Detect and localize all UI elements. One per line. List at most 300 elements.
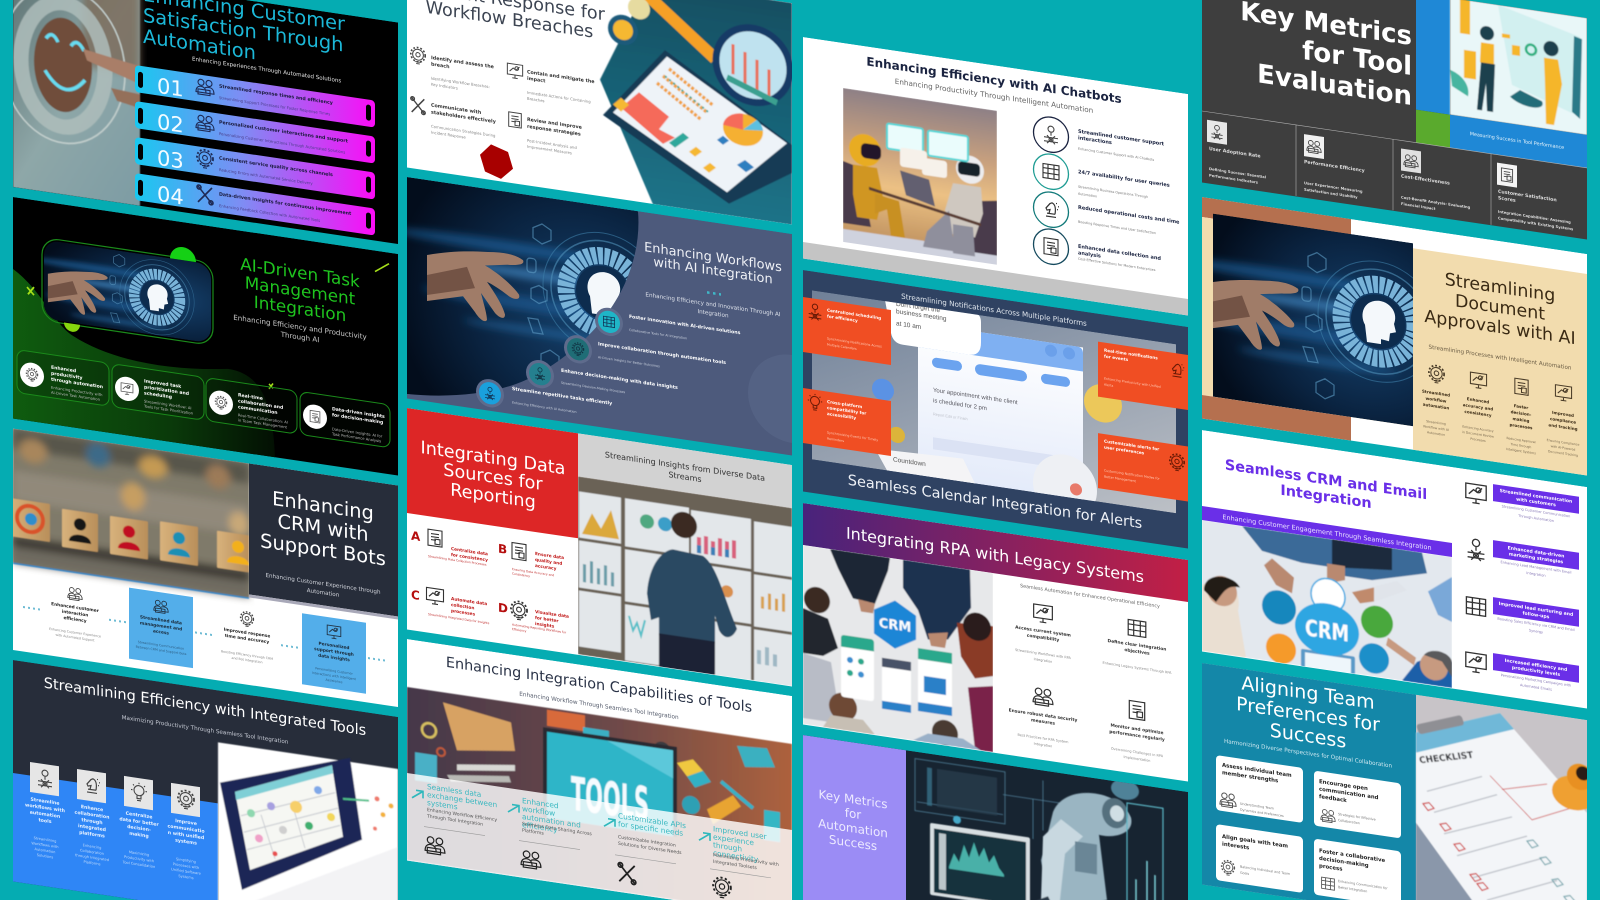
item D: Efficiency	[512, 627, 527, 633]
item: streamline workflows: Streamline	[31, 797, 59, 807]
feature: increased efficiency: Personalizing Marketing Campaigns with	[1501, 673, 1571, 688]
column 4: support through	[314, 646, 354, 658]
title block: Reporting	[450, 480, 536, 513]
column: improved user experience: Integrated Toolsets	[713, 859, 757, 871]
item: centralize data: making	[129, 831, 149, 840]
card 4: Task Performance Analysis	[331, 432, 381, 443]
subtitle: Enhancing Experiences Through Automated Solutions	[192, 57, 341, 85]
feature: data-driven marketing	[1468, 536, 1579, 583]
column: faster decisions: Faster	[1514, 403, 1529, 410]
subtitle: Enhancing Efficiency and Productivity	[233, 313, 367, 341]
item C: processes	[451, 608, 476, 618]
column 2	[129, 588, 193, 668]
item B: accuracy	[535, 563, 557, 572]
metric: user adoption: Defining Success: Essential	[1209, 167, 1266, 179]
cell: data security	[1009, 684, 1077, 752]
item: communicate	[411, 96, 497, 144]
metric: cost effectiveness: Financial Impact	[1401, 202, 1436, 211]
item: contain: Breaches	[527, 96, 545, 103]
item: centralize data: Centralize	[126, 811, 152, 821]
card 2: Improved task	[144, 378, 182, 390]
title block: Key Metrics	[818, 787, 888, 811]
panel: integrating RPA with legacy systems	[803, 503, 1188, 782]
item: communicate: stakeholders effectively	[431, 110, 497, 125]
item D	[498, 598, 569, 639]
panel: enhancing integration capabilities of tools	[407, 639, 792, 900]
illustration: calendar window: Countdown	[893, 456, 926, 468]
panel: enhancing workflows with AI integration	[393, 175, 836, 462]
item: centralize data: decision-	[127, 824, 151, 833]
metric: performance efficiency: User Experience: Measuring	[1304, 181, 1363, 194]
column 2: access	[153, 629, 169, 637]
card: open communication	[1314, 771, 1401, 838]
illustration: calendar window: Report Edit or Finish	[933, 412, 968, 421]
cell: monitor performance: performance regularly	[1109, 729, 1165, 743]
cell: assess compatibility: Access current system	[1015, 624, 1071, 639]
subtitle: Enhancing Workflow Through Seamless Tool Integration	[519, 692, 679, 721]
item: enhance collaboration: Collaboration	[80, 848, 104, 856]
illustration: robot and monitor	[915, 749, 1163, 900]
column: enhanced accuracy: accuracy and	[1463, 402, 1493, 412]
brown bottom band	[1202, 395, 1351, 441]
card 2: Streamlining Workflow: AI	[144, 399, 192, 410]
card 1: productivity	[51, 371, 82, 381]
panel: key metrics for tool evaluation	[1202, 0, 1587, 240]
blue panel background	[1202, 663, 1416, 900]
card: align goals: interests	[1222, 841, 1249, 851]
column: customizable APIs: Solutions for Diverse Needs	[618, 841, 682, 856]
title: Streamlining	[1445, 270, 1555, 306]
feature: streamlined communication: Through Automation	[1517, 514, 1554, 523]
metric: performance efficiency: Performance Efficiency	[1304, 159, 1365, 174]
item: improve collaboration	[564, 333, 726, 385]
card: collaborative decisions: Better Integration	[1338, 885, 1367, 893]
column: enhanced accuracy: in Document Review	[1462, 430, 1494, 439]
title block: CRM with	[277, 510, 369, 546]
card: align goals	[1216, 824, 1303, 893]
callout: real-time notifications	[1098, 342, 1188, 410]
item D: for better	[535, 615, 559, 625]
item: identify: breach	[431, 62, 450, 70]
illustration: analysts at dashboard	[1450, 0, 1587, 135]
cell: monitor performance: Monitor and optimize	[1111, 723, 1163, 736]
callout: real-time notifications: Alerts	[1104, 383, 1114, 388]
title: with AI Integration	[653, 255, 773, 288]
cell: define objectives	[1102, 616, 1172, 675]
column: improved compliance: Ensuring Compliance	[1547, 438, 1579, 447]
connector dots	[23, 607, 386, 661]
title block: Enhancing	[272, 487, 374, 525]
title: Evaluation	[1257, 59, 1412, 112]
title: Success	[1270, 719, 1346, 753]
item 03: 03	[157, 145, 184, 174]
cell: define objectives: Define clear integration	[1108, 638, 1166, 653]
item A: Streamlining Data Collection Processes	[428, 554, 487, 567]
column 4: Assistance	[326, 678, 343, 684]
column: improved user experience: Improved user	[713, 824, 768, 841]
title bar: Integrating RPA with Legacy Systems	[846, 523, 1144, 586]
callout: cross-platform: Cross-platform	[827, 399, 863, 409]
card 3: collaboration and	[238, 398, 283, 411]
item 02: Personalized customer interactions and support	[219, 120, 349, 145]
item: improve communication: Processes with	[173, 862, 199, 870]
item B: Ensuring Data Accuracy and	[512, 567, 554, 577]
table rules	[1202, 111, 1587, 239]
photo: desk with tools and laptop: TOOLS	[571, 767, 649, 832]
item 03: Consistent service quality across channels	[219, 156, 333, 178]
metric: customer satisfaction: Customer Satisfaction	[1498, 189, 1557, 203]
metric: user adoption: User Adoption Rate	[1209, 146, 1261, 160]
feature: lead nurturing	[1466, 593, 1579, 640]
callout: cross-platform: compatibility for	[827, 405, 867, 416]
title block	[249, 463, 398, 619]
panel: seamless CRM and email integration	[1202, 430, 1587, 711]
column: faster decisions	[1506, 377, 1536, 455]
item: improve communication: Simplifying	[176, 857, 196, 864]
photo: wooden blocks with person icons	[8, 428, 249, 599]
column: enhanced accuracy: Enhanced	[1467, 396, 1489, 405]
panel: customer satisfaction through automation	[1, 0, 398, 244]
item 03: Reducing Errors with Automated Service Delivery	[219, 167, 313, 186]
item: communicate: Incident Response	[431, 130, 466, 140]
cell: assess compatibility: Integration	[1034, 657, 1052, 664]
card 3: Real-time	[238, 392, 263, 402]
column: faster decisions: decision-	[1511, 409, 1532, 417]
callout: centralized scheduling: Multiple Calendars	[827, 343, 857, 351]
item: contain: Contain and mitigate the	[527, 69, 595, 85]
cell: assess compatibility: compatibility	[1027, 633, 1059, 643]
item D: Automating Reporting Workflows for	[512, 623, 567, 635]
callout: centralized scheduling: for efficiency	[827, 314, 858, 323]
column: streamlined workflow: automation	[1423, 402, 1449, 411]
column: enhanced accuracy: Processes	[1470, 437, 1486, 443]
column 4	[302, 613, 366, 694]
item: improve communication: Unified Software	[171, 867, 202, 876]
icon: red hexagon	[480, 143, 513, 181]
card: align goals: Goals	[1240, 871, 1249, 876]
title: Integration	[1280, 483, 1372, 512]
item: streamline workflows: tools	[38, 817, 52, 825]
title: Enhancing Workflows	[644, 240, 782, 275]
card: open communication: feedback	[1319, 794, 1347, 804]
photo: man viewing chart wall	[578, 476, 792, 687]
card: collaborative decisions	[1314, 839, 1401, 900]
title block: Success	[829, 832, 877, 853]
decorative circle	[748, 348, 836, 449]
title: Aligning Team	[1241, 671, 1375, 714]
card 1	[17, 350, 109, 406]
metric: customer satisfaction	[1497, 163, 1574, 232]
illustration: calendar window: Your appointment with the client	[933, 388, 1018, 406]
item 02	[135, 101, 375, 166]
column: improved compliance: and tracking	[1548, 422, 1578, 432]
item: streamline tasks: Enhancing Efficiency with AI Automation	[512, 401, 577, 414]
feature: data-driven marketing: Enhanced data-driven	[1508, 545, 1564, 560]
photo: CRM table meeting: CRM	[1305, 615, 1349, 648]
item 01: 01	[157, 73, 184, 102]
title block: for	[845, 806, 861, 822]
feature: data-driven marketing: Enhancing Lead Management with Email	[1500, 560, 1572, 575]
item A	[411, 527, 488, 567]
title: for Tool	[1302, 36, 1412, 82]
item D: D	[498, 601, 508, 616]
subtitle: Harmonizing Diverse Perspectives for Optimal Collaboration	[1224, 739, 1392, 770]
column: improved compliance: Document Tracking	[1548, 449, 1578, 458]
cell: data security: Ensure robust data security	[1009, 707, 1077, 724]
card: collaborative decisions: Foster a collaborative	[1319, 848, 1386, 864]
column: improved compliance	[1547, 383, 1579, 458]
item: foster innovation: Foster innovation with AI-driven solutions	[629, 314, 741, 336]
title block: Automation	[818, 816, 888, 841]
cell: monitor performance: Overcoming Challenges in RPA	[1111, 747, 1164, 758]
item: contain	[507, 63, 595, 111]
item: review: Post-Incident Analysis and	[527, 138, 577, 150]
item: communicate: Communication Strategies During	[431, 124, 496, 138]
column 4: Personalizing Customer	[315, 666, 353, 676]
column: enhanced accuracy: consistency	[1464, 409, 1492, 418]
green block	[1416, 110, 1450, 148]
item 04: Data-driven insights for continuous improvement	[219, 192, 352, 217]
item: enhanced data: Cost-Effective Solutions for Modern Enterprises	[1078, 257, 1156, 272]
card 2: Tools for Task Prioritization	[143, 404, 194, 416]
card 1: Enhancing Productivity with	[51, 386, 103, 397]
cell: monitor performance	[1109, 698, 1165, 765]
dots	[707, 292, 721, 294]
title: Streamlining Efficiency with Integrated Tools	[44, 675, 366, 739]
item: customer support: Enhancing Customer Support with AI Chatbots	[1078, 147, 1154, 162]
card 3	[206, 378, 297, 434]
feature: increased efficiency: productivity levels	[1512, 665, 1560, 678]
item: improve communication: n with unified	[168, 830, 204, 841]
card: collaborative decisions: decision-making	[1319, 856, 1369, 869]
photo: two robots chatting at table	[843, 88, 997, 266]
item: identify: Identifying Workflow Breaches:	[431, 76, 490, 89]
item: streamline workflows: automation	[30, 810, 60, 820]
card 4: for decision-making	[332, 412, 383, 426]
blue column	[1416, 0, 1450, 115]
feature: streamlined communication: Streamlining Customer Communication	[1502, 504, 1570, 519]
callout: centralized scheduling	[803, 297, 891, 365]
title: Enhancing Integration Capabilities of Tools	[446, 655, 752, 716]
card 1: AI-Driven Task Automation	[51, 391, 101, 402]
item: identify: Identify and assess the	[431, 55, 495, 70]
subtitle: Streamlining Notifications Across Multiple Platforms	[901, 292, 1087, 328]
item: improve communication: communicatio	[167, 823, 205, 835]
panel: seamless calendar integration for alerts	[803, 270, 1188, 549]
item: enhance collaboration: Platforms	[83, 860, 101, 866]
callout: cross-platform: accessibility	[827, 411, 856, 420]
metric: user adoption: Performance Indicators	[1209, 174, 1259, 185]
item C: C	[411, 588, 420, 603]
column 3: and Bot Integration	[232, 656, 262, 664]
item D: insights	[535, 621, 555, 630]
callout: real-time notifications: for events	[1104, 354, 1129, 362]
item: enhance decisions: Enhance decision-making with data insights	[561, 368, 678, 391]
item: streamline workflows: Workflows with	[31, 841, 59, 849]
photo: team around CRM table	[803, 545, 993, 753]
photo: team around CRM table: CRM	[879, 616, 911, 636]
card: open communication: Collaboration	[1338, 818, 1360, 825]
illustration: dashboard with magnifier	[600, 0, 792, 225]
item: reduced costs: Boosting Response Times and User Satisfaction	[1078, 220, 1156, 235]
column: faster decisions: Intelligent Systems	[1506, 447, 1536, 455]
card 1: Enhanced	[51, 365, 76, 374]
panel: enhancing CRM with support bots	[8, 428, 398, 707]
column 4: Personalized	[318, 641, 350, 651]
item: improve communication: systems	[175, 838, 197, 847]
item: foster innovation: Collaborative Tools for AI Integration	[629, 328, 687, 340]
column: enhanced workflow automation	[508, 794, 592, 877]
column: customizable APIs	[604, 809, 686, 892]
title block: Sources for	[443, 460, 543, 495]
column: customizable APIs: for specific needs	[618, 819, 683, 838]
item: enhance collaboration: Enhance	[81, 804, 103, 813]
column: improved user experience: through	[713, 840, 742, 854]
item: enhance collaboration: platforms	[79, 830, 105, 840]
illustration: calendar window: is cheduled for 2 pm	[933, 398, 987, 412]
metric: user adoption	[1207, 120, 1266, 186]
column 3: time and accuracy	[225, 633, 269, 645]
title: Seamless Calendar Integration for Alerts	[848, 472, 1142, 532]
purple subtitle bar: Enhancing Customer Engagement Through Seamless Integration	[1222, 513, 1432, 552]
feature: lead nurturing: Improved lead nurturing and	[1499, 601, 1573, 618]
metric: cost effectiveness	[1401, 148, 1471, 216]
callout: customizable alerts: user preferences	[1104, 445, 1145, 456]
item: 24/7 availability: Streamlining Business Operations Through	[1078, 185, 1148, 199]
brown top band	[1202, 197, 1351, 239]
card: assess strengths	[1216, 755, 1303, 823]
panel: aligning team preferences for success	[1202, 663, 1596, 900]
feature: streamlined communication: with customers	[1516, 497, 1556, 508]
card: assess strengths: member strengths	[1222, 770, 1278, 784]
translucent card band	[407, 773, 792, 900]
feature: lead nurturing: Synergy	[1529, 628, 1543, 634]
column: streamlined workflow	[1422, 364, 1450, 438]
panel: streamlining efficiency with integrated tools	[13, 660, 398, 900]
item: identify: Key Indicators	[431, 82, 458, 91]
card 2	[112, 364, 204, 420]
feature: increased efficiency: Increased efficiency and	[1505, 658, 1567, 673]
title block: Support Bots	[260, 529, 386, 571]
photo: desk with tools and laptop	[407, 687, 792, 900]
title block	[803, 735, 906, 900]
title: Management	[245, 272, 356, 309]
card 4	[300, 391, 390, 448]
column 4: Interactions with Intelligent	[312, 671, 357, 681]
item: enhanced data	[1034, 227, 1161, 281]
title: Preferences for	[1236, 692, 1380, 736]
callout: cross-platform	[803, 388, 891, 456]
column 1	[49, 584, 101, 644]
column: seamless data exchange: exchange between	[427, 790, 498, 809]
column: enhanced workflow automation: Seamless Data Sharing Across	[522, 821, 592, 837]
item C: Streamlining Integrated Data for Insights	[428, 612, 490, 625]
column: faster decisions: processes	[1509, 422, 1533, 430]
item B: B	[498, 542, 507, 557]
item: streamline tasks: Streamline repetitive tasks efficiently	[512, 386, 612, 407]
photo: checklist on clipboard with coffee	[1416, 701, 1596, 900]
column 3	[221, 608, 273, 666]
title block: Integrating Data	[421, 438, 565, 479]
item: contain: Immediate Actions for Containing	[527, 90, 591, 104]
card 3: Real-Time Collaboration: AI	[238, 413, 288, 425]
item: enhance collaboration: through	[81, 817, 103, 826]
title bar	[803, 503, 1188, 602]
cell: define objectives: objectives	[1124, 647, 1150, 657]
title block: Automation	[307, 588, 340, 599]
item: streamline workflows: Streamlining	[34, 836, 56, 843]
card: align goals: Balancing Individual and Team	[1240, 865, 1290, 876]
item: streamline workflows: workflows with	[25, 802, 65, 814]
illustration: calendar window: at 10 am	[896, 320, 921, 331]
card: assess strengths: Understanding Team	[1240, 802, 1274, 811]
item: communicate: Communicate with	[431, 103, 482, 116]
item C: collection	[451, 602, 474, 611]
callout: real-time notifications: Enhancing Productivity with Unified	[1104, 377, 1161, 389]
item: improve communication: Systems	[178, 874, 194, 880]
subtitle: Seamless Automation for Enhanced Operational Efficiency	[1020, 583, 1160, 610]
column: improved user experience: connectivity	[713, 848, 759, 864]
card 1: through automation	[51, 377, 103, 390]
item: enhance collaboration: through Integrated	[75, 853, 109, 862]
subtitle: Integration	[697, 309, 729, 320]
card 2: scheduling	[144, 390, 172, 401]
callout: cross-platform: Reminders	[827, 437, 844, 443]
blue caption strip	[1450, 115, 1587, 168]
panel: integrating data sources for reporting	[407, 408, 792, 687]
cell: data security: measures	[1031, 717, 1055, 727]
column: enhanced workflow automation: Platforms	[522, 828, 544, 837]
callout: customizable alerts	[1098, 433, 1188, 501]
title: AI-Driven Task	[240, 254, 360, 291]
item 04	[135, 173, 375, 238]
column: enhanced accuracy: Enhancing Accuracy	[1462, 425, 1494, 433]
metric: cost effectiveness: Cost-Effectiveness	[1401, 173, 1450, 187]
column: improved user experience: Maximizing Productivity with	[713, 852, 779, 868]
item: foster innovation	[595, 306, 741, 355]
subtitle: Enhancing Efficiency and Innovation Through AI	[645, 292, 781, 318]
photo: smiley touch screen	[1, 0, 140, 206]
title: Seamless CRM and Email	[1225, 457, 1427, 503]
column 2: Between CRM and Support Bots	[136, 645, 187, 656]
column: seamless data exchange: systems	[427, 798, 458, 811]
feature: increased efficiency: Automated Emails	[1520, 683, 1552, 692]
item: 24/7 availability: 24/7 availability for user queries	[1078, 169, 1170, 189]
subtitle band	[578, 433, 792, 508]
item: reduced costs: Reduced operational costs and time	[1078, 205, 1180, 226]
cell: assess compatibility	[1015, 601, 1072, 667]
column: streamlined workflow: workflow	[1426, 396, 1447, 404]
column 2: Streamlined data	[140, 614, 182, 627]
item B: quality and	[535, 557, 562, 567]
column 1: interaction	[62, 609, 88, 619]
panel: AI-driven task management	[13, 197, 398, 476]
callout: customizable alerts: Customizing Notification Modes for	[1104, 469, 1160, 481]
column 2: Streamlining Communication	[138, 640, 184, 651]
column: enhanced workflow automation: efficiency	[522, 820, 558, 834]
metric: performance efficiency	[1304, 134, 1365, 201]
card: open communication: Strategies for Effective	[1338, 812, 1376, 822]
feature: lead nurturing: Boosting Sales Efficiency via CRM and Email	[1497, 617, 1575, 632]
column: streamlined workflow: Workflow with AI	[1423, 424, 1449, 432]
metric: cost effectiveness: Cost-Benefit Analysis: Evaluating	[1401, 195, 1471, 210]
item A: A	[411, 529, 421, 544]
illustration: calendar window: Don't forget the	[896, 301, 940, 314]
photo: checklist on clipboard with coffee: CHECKLIST	[1418, 751, 1475, 766]
feature: streamlined communication: Streamlined communication	[1500, 488, 1572, 505]
decorative circle	[170, 245, 196, 262]
illustration: calendar window: business meeting	[896, 308, 947, 323]
